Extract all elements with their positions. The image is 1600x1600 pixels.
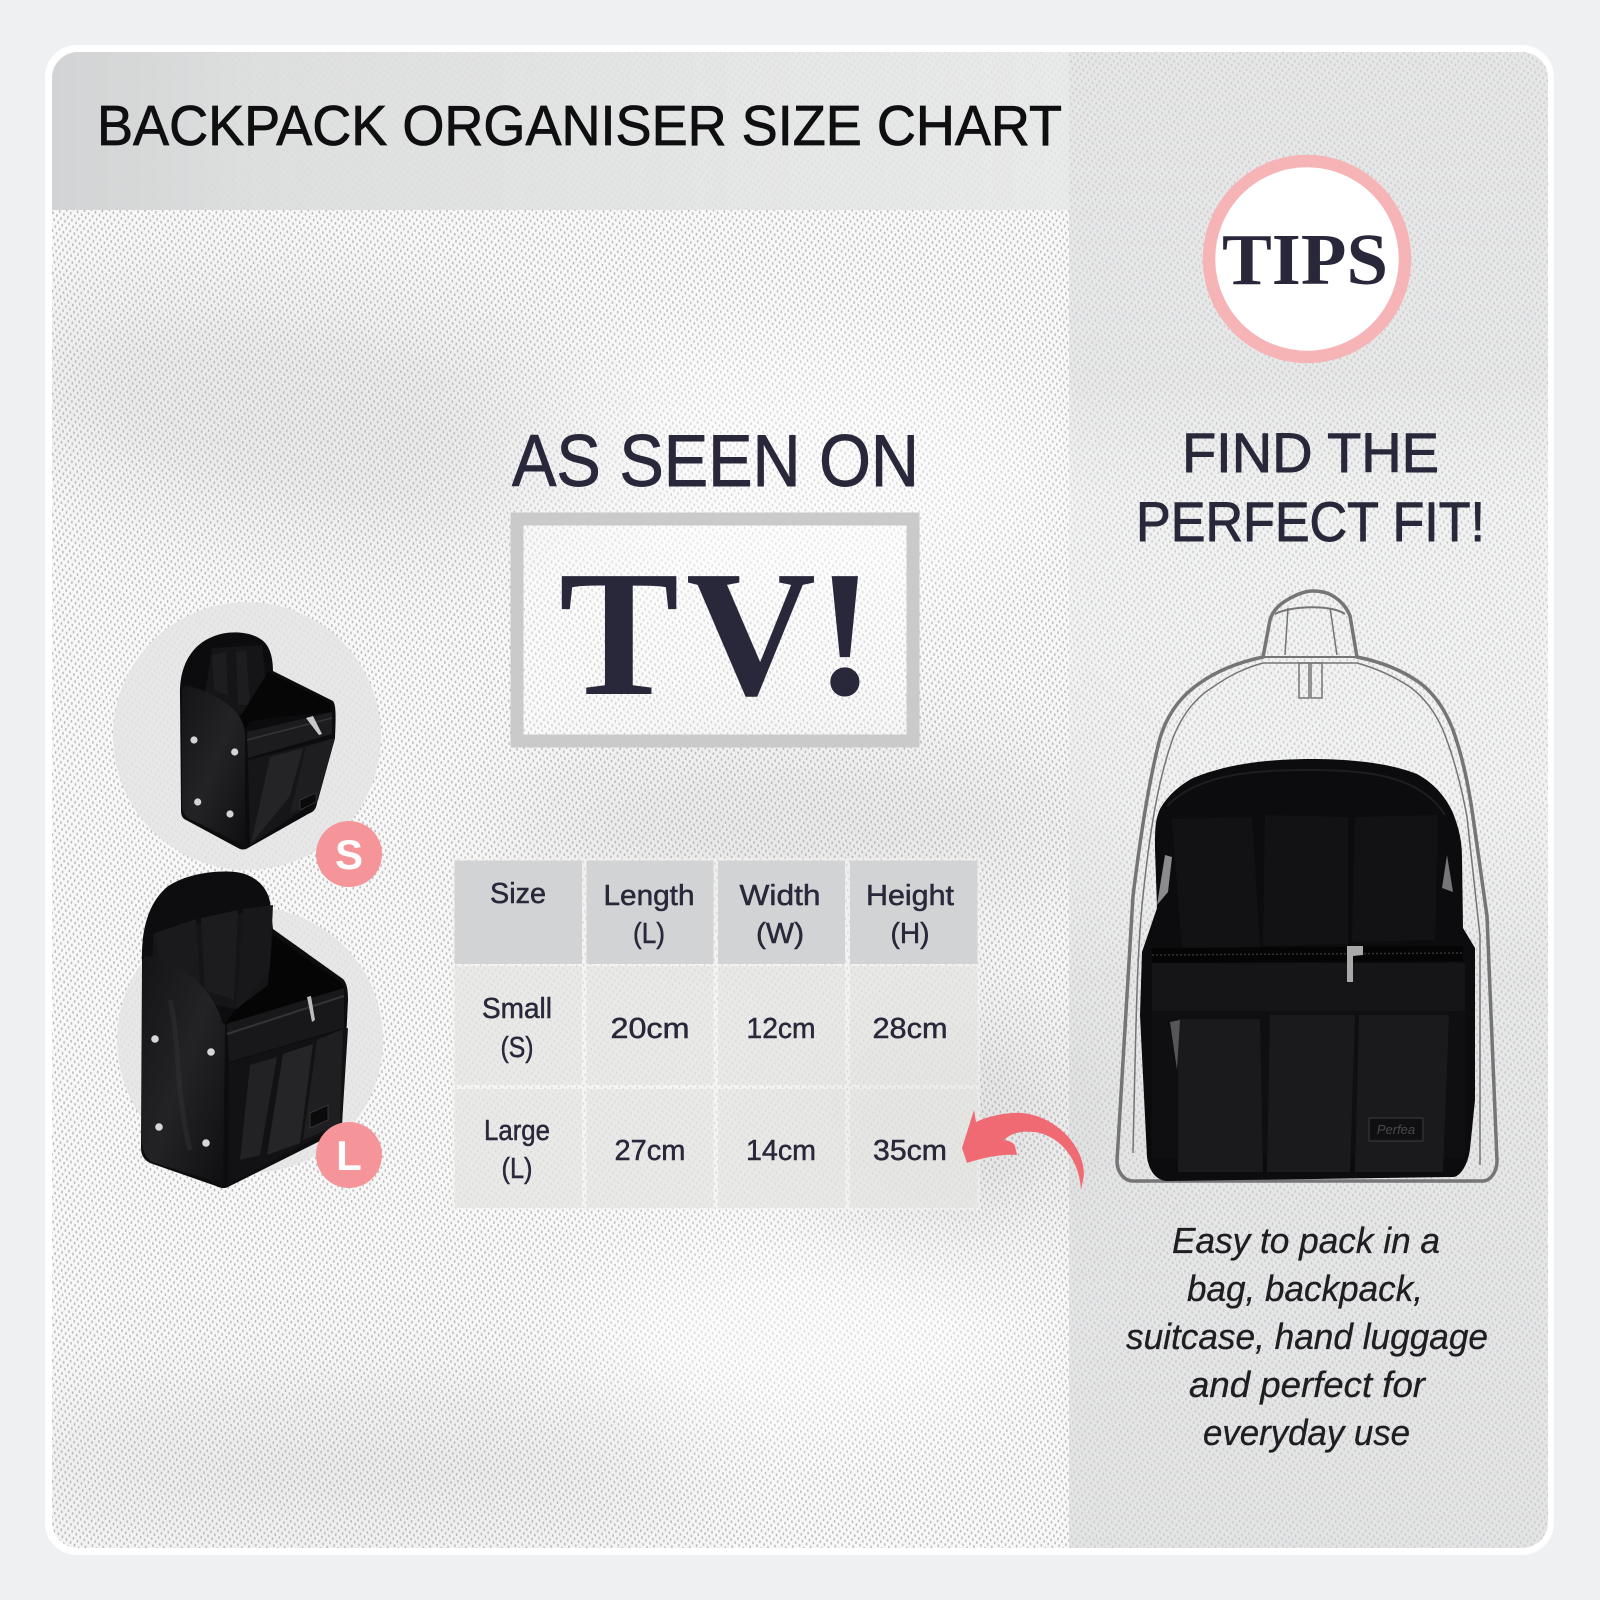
row: large: 27cm [614,1135,686,1167]
row: small: 28cm [872,1013,948,1045]
size badge S: S [335,831,363,878]
circle backdrop S [113,602,381,870]
badge text: TV! [559,534,875,733]
front band [1152,963,1465,1011]
row: large: 14cm [746,1135,816,1167]
row: large: (L) [502,1153,532,1185]
TV badge [517,519,913,741]
row: small: 12cm [746,1013,816,1045]
heading: find the perfect fit: PERFECT FIT! [1136,490,1485,553]
arrow [962,1110,1084,1190]
tips paragraph: everyday use [1203,1412,1410,1453]
row: small: 20cm [610,1013,690,1045]
tips paragraph: bag, backpack, [1187,1268,1423,1309]
tips paragraph: suitcase, hand luggage [1126,1316,1488,1357]
heading: find the perfect fit [1136,421,1485,553]
zip pull [1347,946,1363,982]
table frame [452,858,980,1210]
backpack outline [1117,591,1497,1181]
header labels: (W) [756,918,804,950]
header labels: Length [604,880,694,912]
tips circle [1209,161,1405,357]
header band [52,52,1069,210]
brand label [1369,1118,1423,1141]
tips paragraph: Easy to pack in a [1172,1220,1440,1261]
brand label: Perfea [1377,1122,1415,1137]
header labels: (H) [890,918,930,950]
back pockets [1172,815,1438,948]
header labels: Height [866,880,954,912]
badge frame [517,519,913,741]
heading: find the perfect fit: FIND THE [1182,421,1439,484]
size S product [113,602,382,887]
organiser inside backpack [1140,759,1475,1181]
title: BACKPACK ORGANISER SIZE CHART [97,94,1062,158]
row: large: 35cm [873,1135,947,1167]
heading: as seen on: AS SEEN ON [512,421,919,502]
size badge L [316,1122,382,1188]
front pockets [1178,1015,1449,1172]
organiser small [180,632,336,850]
header labels: Width [740,880,820,912]
header cells [454,860,978,964]
header labels: (L) [633,918,665,950]
tips paragraph [1126,1220,1488,1453]
size L product [117,872,383,1188]
size badge S [316,821,382,887]
body cells [454,966,978,1208]
row: small [482,993,948,1064]
zip [1152,946,1463,963]
header labels [490,878,954,950]
tips text: TIPS [1222,219,1388,300]
organiser large [141,872,348,1188]
row: small: (S) [500,1032,534,1064]
right column tint [1069,52,1548,1548]
row: large: Large [484,1115,550,1147]
size badge L: L [336,1132,362,1179]
tips badge [1209,161,1405,357]
size table [452,858,980,1210]
row: small: Small [482,993,552,1025]
row: large [484,1115,947,1185]
header labels: Size [490,878,546,910]
circle backdrop L [117,907,383,1173]
tips paragraph: and perfect for [1189,1364,1427,1405]
